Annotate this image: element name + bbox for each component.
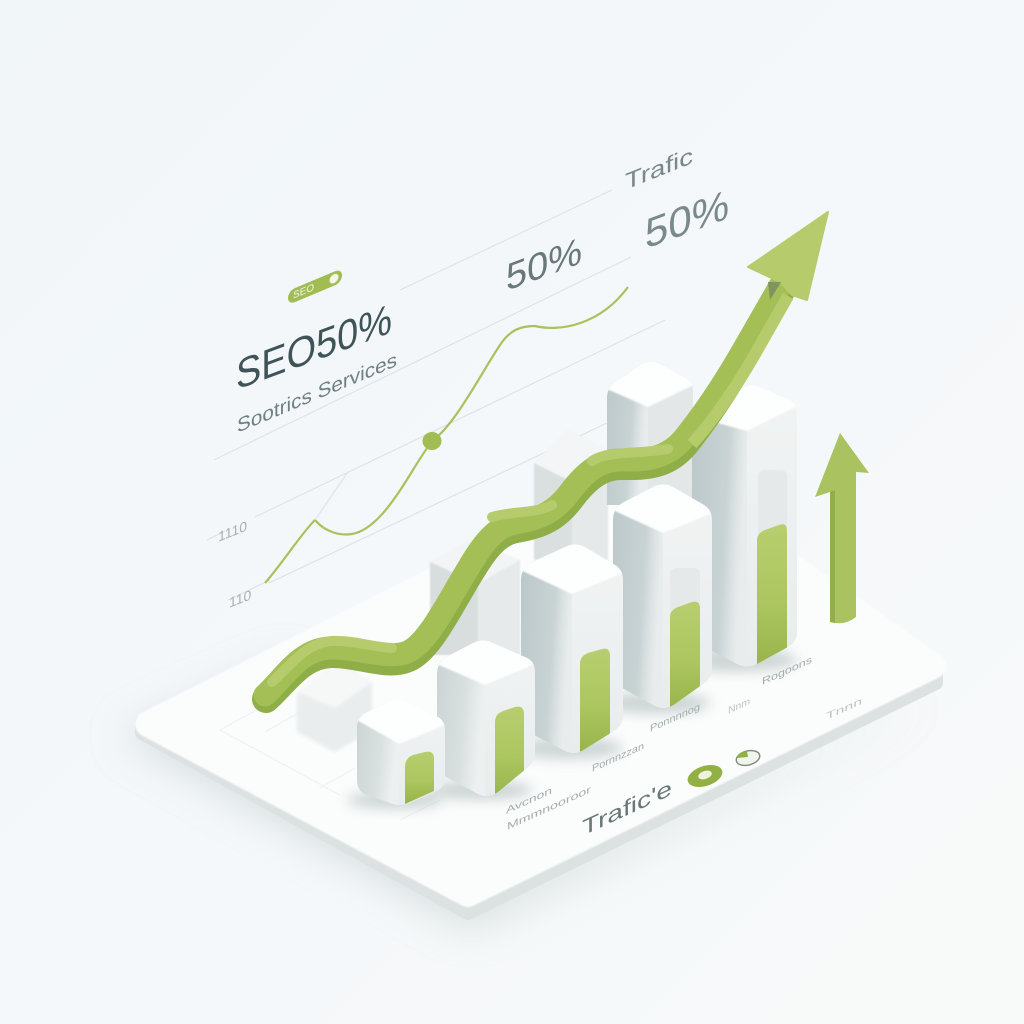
- axis label lower: 110: [229, 588, 251, 612]
- bar 5 ground shadow: [673, 648, 797, 672]
- arrow shaft light side: [692, 296, 788, 444]
- subheading: services: Sootrics Services: [237, 349, 397, 438]
- back bar 4: [607, 362, 693, 505]
- back bar 3: [534, 430, 608, 560]
- axis label upper: 1110: [218, 519, 247, 546]
- bar 3 body: [521, 544, 623, 753]
- small SEO badge: [288, 268, 342, 305]
- bar 5 body: [692, 386, 797, 666]
- arrow body main: [265, 286, 780, 695]
- bar 1 body: [357, 710, 445, 805]
- bar 3: [521, 544, 624, 764]
- platform small labels: Tnnn: [826, 696, 862, 723]
- platform small labels: Pornnzzan: [592, 741, 644, 775]
- back bar far left: [297, 660, 372, 752]
- platform soft shadow: [120, 660, 930, 930]
- icon: small round badge: [735, 748, 761, 768]
- platform small labels: Nnm: [728, 696, 750, 717]
- bar 4 ground shadow: [600, 692, 710, 714]
- bar 2: [430, 640, 535, 805]
- chart data point: [422, 432, 442, 450]
- platform small labels: Ponnnnog: [650, 702, 700, 735]
- big rising arrow: [265, 212, 828, 699]
- line chart: thin green trend line: [265, 287, 628, 583]
- arrow head notch shadow: [768, 282, 781, 300]
- grid lines of line chart: [207, 190, 665, 600]
- faint branch line: [315, 472, 348, 520]
- arrow body dark underside: [266, 291, 781, 699]
- platform top surface: [148, 470, 933, 894]
- platform small labels: [506, 655, 862, 833]
- platform small labels: Mmmnooroor: [507, 784, 592, 833]
- platform small labels: Rogoons: [762, 655, 812, 688]
- label: Trafic: Trafic: [625, 143, 693, 196]
- bar 3 ground shadow: [513, 737, 623, 759]
- label: middle 50%: 50%: [506, 229, 582, 300]
- bar 4 body: [613, 484, 712, 708]
- bar 4: [613, 484, 712, 719]
- label: right 50%: 50%: [645, 181, 729, 259]
- label: Trafic on platform: Trafic'e: [582, 775, 672, 841]
- arrow flat highlights: [272, 449, 668, 682]
- bar 2 ground shadow: [428, 780, 532, 800]
- bar 1 ground shadow: [347, 791, 443, 809]
- back bars: [297, 352, 700, 752]
- infographic scene: [130, 152, 943, 934]
- platform floor grid: [220, 708, 440, 820]
- heading: SEO 50%: SEO50%: [236, 296, 392, 400]
- small up arrow: [815, 433, 869, 623]
- icon: green badge: [685, 761, 725, 791]
- bar 1 (smallest): [346, 710, 445, 814]
- back bar 2: [430, 540, 520, 655]
- bar 2 body: [437, 640, 535, 796]
- platform small labels: Avcnon: [506, 786, 552, 817]
- platform side edge: [142, 672, 936, 913]
- bar 5 (tallest): [692, 386, 798, 677]
- platform: [142, 470, 936, 913]
- arrow head: [748, 212, 828, 300]
- small SEO badge: SEO: [293, 282, 314, 302]
